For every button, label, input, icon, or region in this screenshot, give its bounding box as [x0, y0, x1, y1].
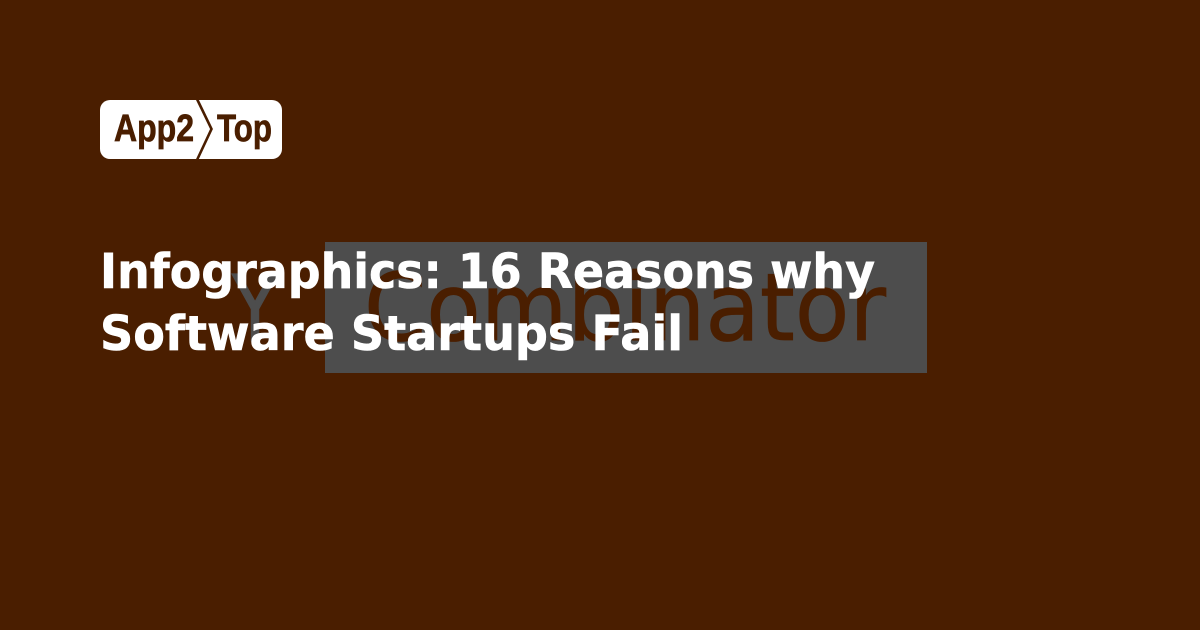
- title: [100, 244, 875, 362]
- background image: Y Combinator logo: [231, 242, 927, 373]
- logo: App2Top: Top: [217, 108, 272, 150]
- title: Software Startups Fail: [100, 306, 683, 362]
- logo: App2Top: App2: [114, 108, 194, 150]
- background image: Y Combinator logo: Combinator: [364, 254, 886, 363]
- logo: App2Top: [100, 99, 282, 160]
- title: Infographics: 16 Reasons why: [100, 244, 875, 300]
- background image: Y Combinator logo: Y: [231, 256, 279, 363]
